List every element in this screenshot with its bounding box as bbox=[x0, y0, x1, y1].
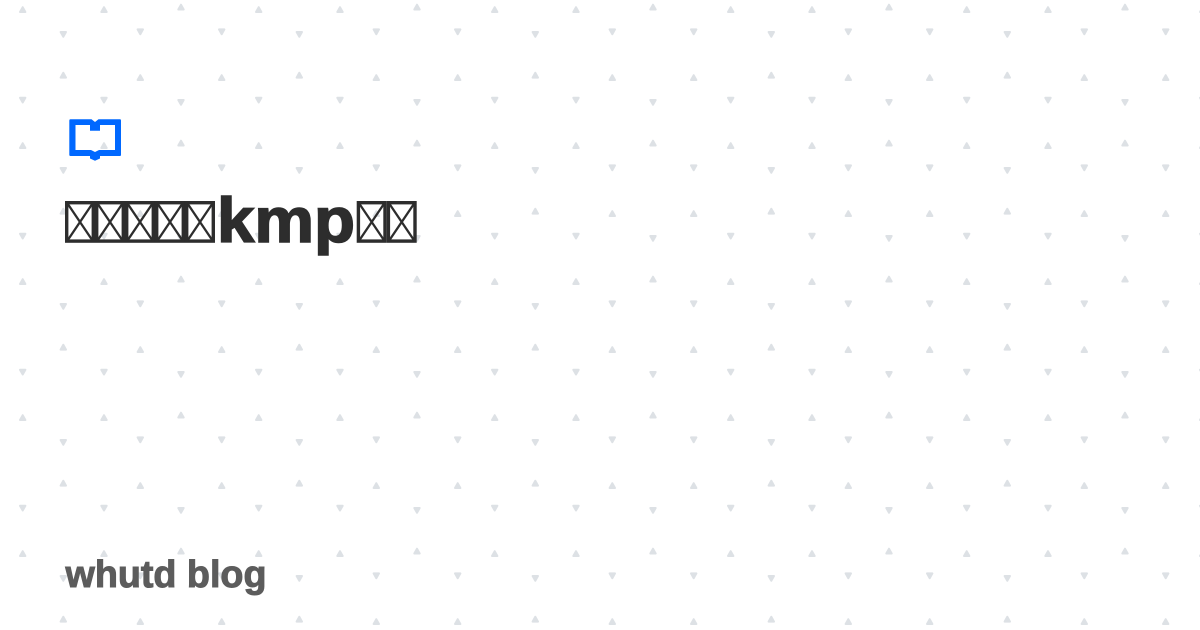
icon: open book logo bbox=[69, 119, 121, 161]
title placeholder glyph boxes, right group bbox=[358, 203, 415, 241]
title text: kmp: kmp bbox=[217, 186, 355, 256]
title bbox=[67, 186, 415, 256]
site name: whutd blog bbox=[65, 554, 267, 596]
title placeholder glyph boxes, left group bbox=[67, 203, 213, 241]
